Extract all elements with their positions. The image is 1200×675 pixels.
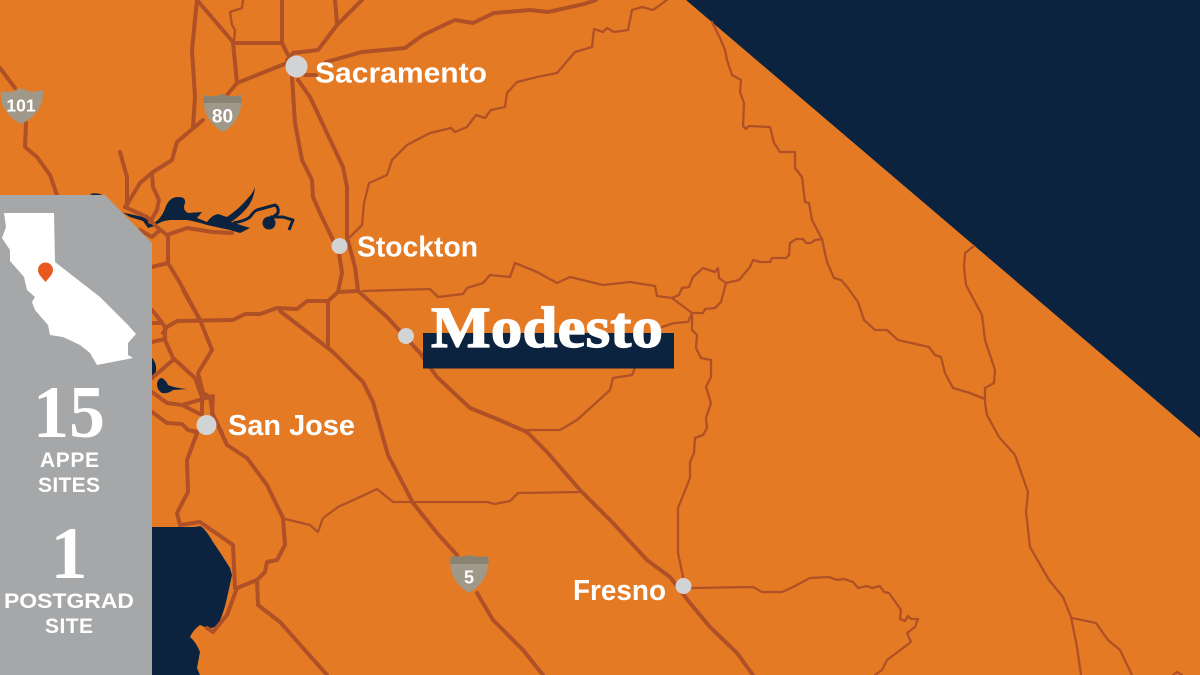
major highways <box>0 0 753 675</box>
highway shield: 80 <box>203 94 242 132</box>
highway shield: 101 <box>1 88 43 124</box>
water: Pacific ocean and bays <box>90 187 293 675</box>
statistic: 1 postgrad site: POSTGRAD <box>4 590 134 613</box>
California silhouette <box>2 213 136 365</box>
city label: Stockton: Stockton <box>357 232 478 264</box>
panel: California locator and site counts <box>0 195 152 675</box>
minor roads <box>230 0 1182 675</box>
location pin <box>38 262 53 282</box>
statistic: 15 APPE sites: 15 <box>33 372 105 454</box>
highlight bar behind Modesto <box>423 333 674 368</box>
highway shield: 5 <box>450 555 489 593</box>
statistic: 15 APPE sites <box>33 372 105 497</box>
out-of-region navy corner <box>686 0 1200 438</box>
city marker: Fresno <box>676 578 692 594</box>
statistic: 15 APPE sites: SITES <box>38 474 100 497</box>
city marker: San Jose <box>196 415 216 435</box>
statistic: 1 postgrad site <box>4 513 134 638</box>
heading: Modesto: Modesto <box>431 295 663 360</box>
city label: Sacramento: Sacramento <box>315 58 487 90</box>
highway shield: 5: 5 <box>464 568 474 588</box>
city label: Fresno: Fresno <box>573 575 666 607</box>
city marker: Sacramento <box>286 56 308 78</box>
statistic: 1 postgrad site: SITE <box>45 615 93 638</box>
highway shield: 101: 101 <box>6 96 36 116</box>
highway shield: 80: 80 <box>212 106 233 128</box>
city marker: Modesto <box>398 328 414 344</box>
statistic: 1 postgrad site: 1 <box>50 513 88 595</box>
city label: San Jose: San Jose <box>228 410 355 442</box>
city marker: Stockton <box>332 238 348 254</box>
statistic: 15 APPE sites: APPE <box>40 449 99 472</box>
